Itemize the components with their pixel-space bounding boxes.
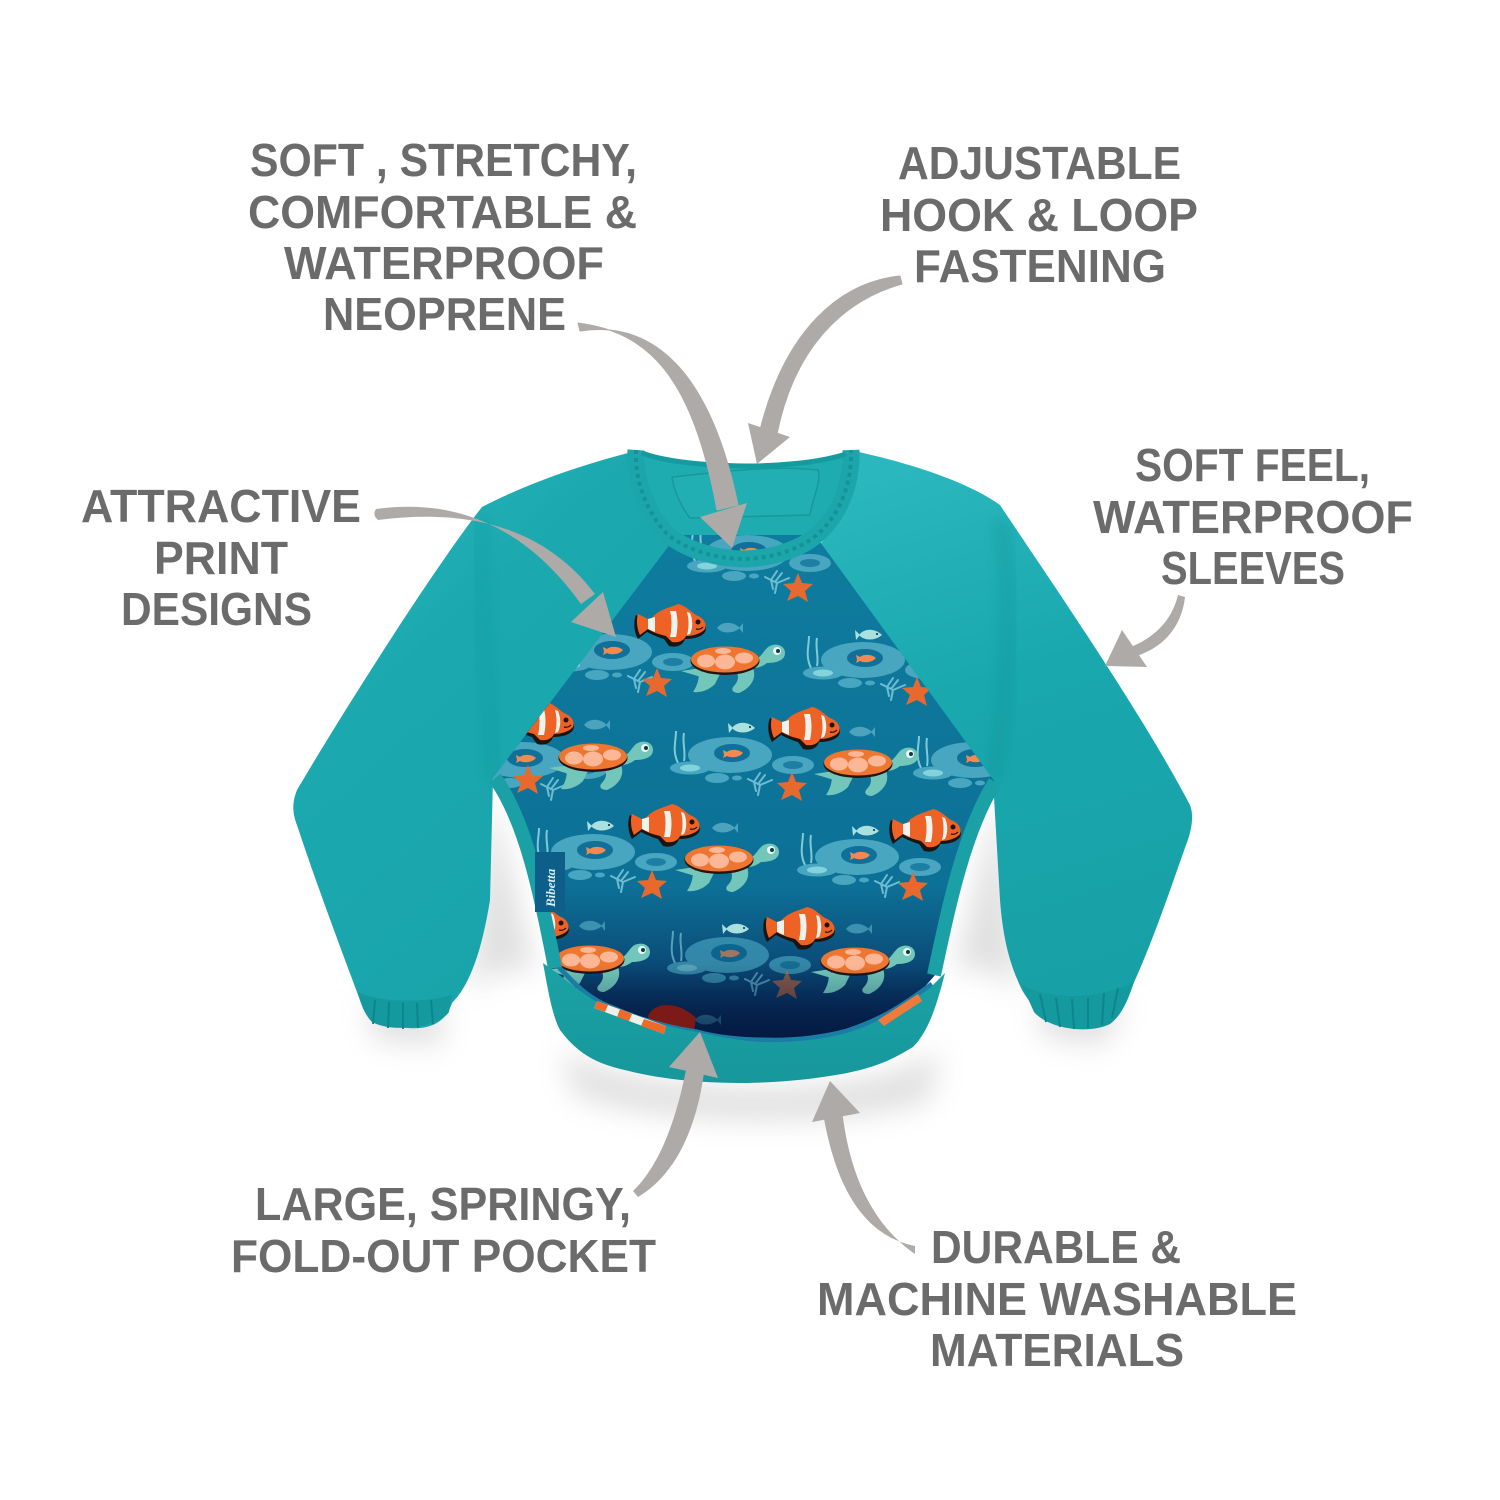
arrow: washable materials [812, 1081, 915, 1254]
lower shadow inside pocket [555, 970, 929, 1025]
left side binding [495, 778, 555, 968]
label: pocket: LARGE, SPRINGY, [255, 1178, 631, 1230]
label: fastening: HOOK & LOOP [880, 189, 1198, 241]
little fish [579, 623, 882, 1025]
folded print strips [594, 994, 922, 1034]
right shoulder fold [998, 527, 1008, 580]
label: materials [817, 1221, 1297, 1376]
label: print designs: PRINT [154, 532, 288, 584]
label: fastening [880, 137, 1198, 292]
back neck binding [642, 453, 846, 466]
label: print designs: ATTRACTIVE [81, 480, 361, 532]
label: fastening: ADJUSTABLE [898, 137, 1181, 189]
label: fastening: FASTENING [914, 240, 1166, 292]
fold-out pocket [543, 963, 945, 1083]
printed neoprene panel [493, 535, 995, 1052]
dark folded clownfish [648, 1005, 696, 1029]
label: print designs [81, 480, 361, 635]
inner neck [640, 452, 850, 562]
hook and loop strap [672, 468, 819, 518]
label: neoprene: SOFT , STRETCHY, [250, 134, 637, 186]
collar stitching [636, 450, 851, 559]
seabed rings [493, 535, 991, 996]
arrow: hook and loop [748, 276, 902, 464]
clownfish [497, 604, 961, 950]
label: sleeves: WATERPROOF [1093, 491, 1413, 543]
label: pocket: FOLD-OUT POCKET [231, 1230, 656, 1282]
arrow: print designs [374, 507, 616, 637]
brand tag [535, 852, 565, 912]
bib garment illustration [293, 450, 1192, 1083]
label: neoprene: NEOPRENE [323, 288, 566, 340]
label: pocket [231, 1178, 656, 1282]
right side binding [934, 782, 995, 975]
collar binding [636, 450, 851, 559]
starfish [513, 573, 932, 999]
label: neoprene: COMFORTABLE & [248, 186, 637, 238]
left cuff [358, 992, 452, 1029]
label: materials: MATERIALS [930, 1324, 1184, 1376]
soft drop shadows [365, 790, 1125, 1120]
label: neoprene [248, 134, 637, 340]
label: sleeves: SLEEVES [1161, 542, 1345, 594]
label: neoprene: WATERPROOF [284, 237, 604, 289]
ocean pattern [493, 535, 991, 1029]
label: materials: DURABLE & [931, 1221, 1181, 1273]
right cuff [1022, 982, 1134, 1029]
left shoulder fold [481, 515, 493, 778]
left sleeve [293, 450, 680, 1028]
arrow: neoprene [578, 323, 747, 548]
arrow: sleeves [1105, 595, 1185, 667]
arrow: pocket [633, 1032, 718, 1197]
pocket rim strip [557, 965, 932, 1040]
label: materials: MACHINE WASHABLE [817, 1273, 1297, 1325]
sea turtles [546, 645, 918, 994]
label: sleeves [1093, 439, 1413, 594]
label: sleeves: SOFT FEEL, [1135, 439, 1370, 491]
right sleeve [815, 450, 1192, 1027]
brand tag: Bibetta [543, 868, 558, 908]
label: print designs: DESIGNS [121, 583, 312, 635]
